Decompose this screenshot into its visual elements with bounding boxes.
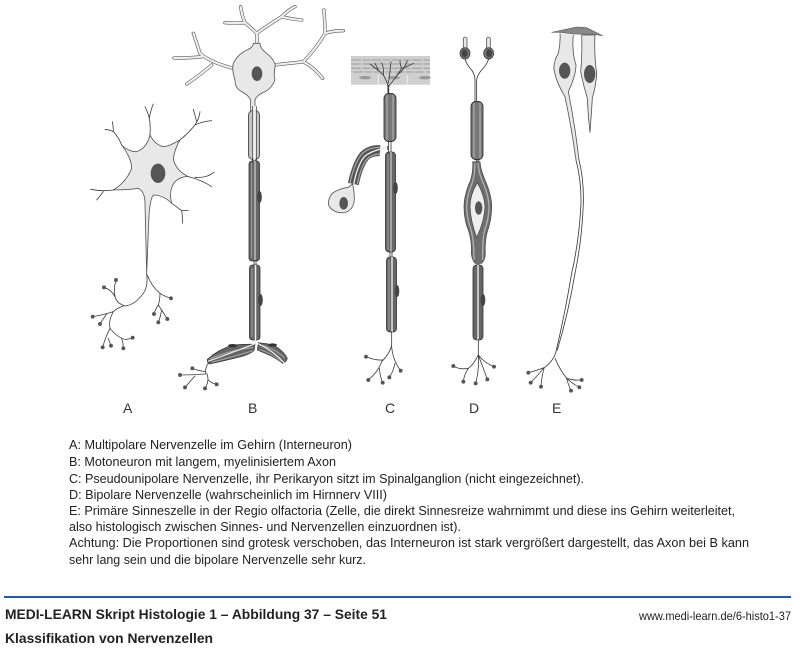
legend text: D: Bipolare Nervenzelle (wahrscheinlich im Hirnnerv VIII): [69, 488, 387, 502]
epithelium and receptor endings C: [351, 56, 431, 95]
sensory ending cells D: [460, 37, 494, 102]
neuron E: olfactory sensory cell: [528, 27, 603, 391]
legend text: A: Multipolare Nervenzelle im Gehirn (Interneuron): [69, 438, 352, 452]
neuron C: pseudounipolar nerve cell: [328, 56, 431, 383]
footer title: MEDI-LEARN Skript Histologie 1 – Abbildung 37 – Seite 51: [5, 606, 387, 622]
legend text: Achtung: Die Proportionen sind grotesk verschoben, das Interneuron ist stark vergrößert dargestellt, das Axon bei B kann: [69, 536, 749, 550]
dendrites A: [91, 104, 214, 223]
feet and terminal branches B: [180, 343, 287, 388]
figure letters: [123, 400, 561, 416]
figure letters: B: [248, 400, 257, 416]
legend text: B: Motoneuron mit langem, myelinisiertem Axon: [69, 455, 336, 469]
spinal ganglion cell C: [328, 146, 389, 213]
figure letters: E: [552, 400, 561, 416]
myelin segments C: [384, 94, 399, 332]
terminal branches C: [366, 332, 401, 383]
footer subtitle: Klassifikation von Nervenzellen: [5, 630, 213, 646]
footer rule: [4, 596, 791, 598]
cap E: [552, 27, 603, 36]
legend text: C: Pseudounipolare Nervenzelle, ihr Perikaryon sitzt im Spinalganglion (nicht eingezeichnet).: [69, 472, 584, 486]
soma A: [113, 135, 188, 273]
figure letters: C: [385, 400, 395, 416]
nucleus B: [252, 66, 262, 81]
legend text: E: Primäre Sinneszelle in der Regio olfactoria (Zelle, die direkt Sinnesreize wahrnimmt und diese ins Gehirn weiterleitet,: [69, 504, 735, 518]
nucleus A: [151, 164, 165, 183]
myelin segments D: [471, 102, 485, 342]
footer url: www.medi-learn.de/6-histo1-37: [638, 609, 791, 623]
neuron A: multipolar nerve cell: [91, 104, 214, 348]
neuron B: motoneuron: [174, 7, 343, 388]
axon terminals A: [114, 273, 147, 306]
cell bodies E: [552, 27, 603, 160]
figure letters: D: [469, 400, 479, 416]
legend text: [69, 438, 749, 567]
myelin segments B: [248, 106, 263, 344]
axon and terminal branches E: [528, 160, 583, 391]
terminal branches D: [453, 339, 494, 383]
legend text: also histologisch zwischen Sinnes- und Nervenzellen einzuordnen ist).: [69, 520, 461, 534]
legend text: sehr lang sein und die bipolare Nervenzelle sehr kurz.: [69, 553, 366, 567]
figure letters: A: [123, 400, 133, 416]
dendrites and soma B: [174, 7, 343, 112]
soma D with myelin sheath: [464, 162, 492, 263]
neuron D: bipolar nerve cell: [453, 37, 494, 383]
nuclei E: [559, 63, 570, 79]
nucleus D: [475, 201, 482, 215]
